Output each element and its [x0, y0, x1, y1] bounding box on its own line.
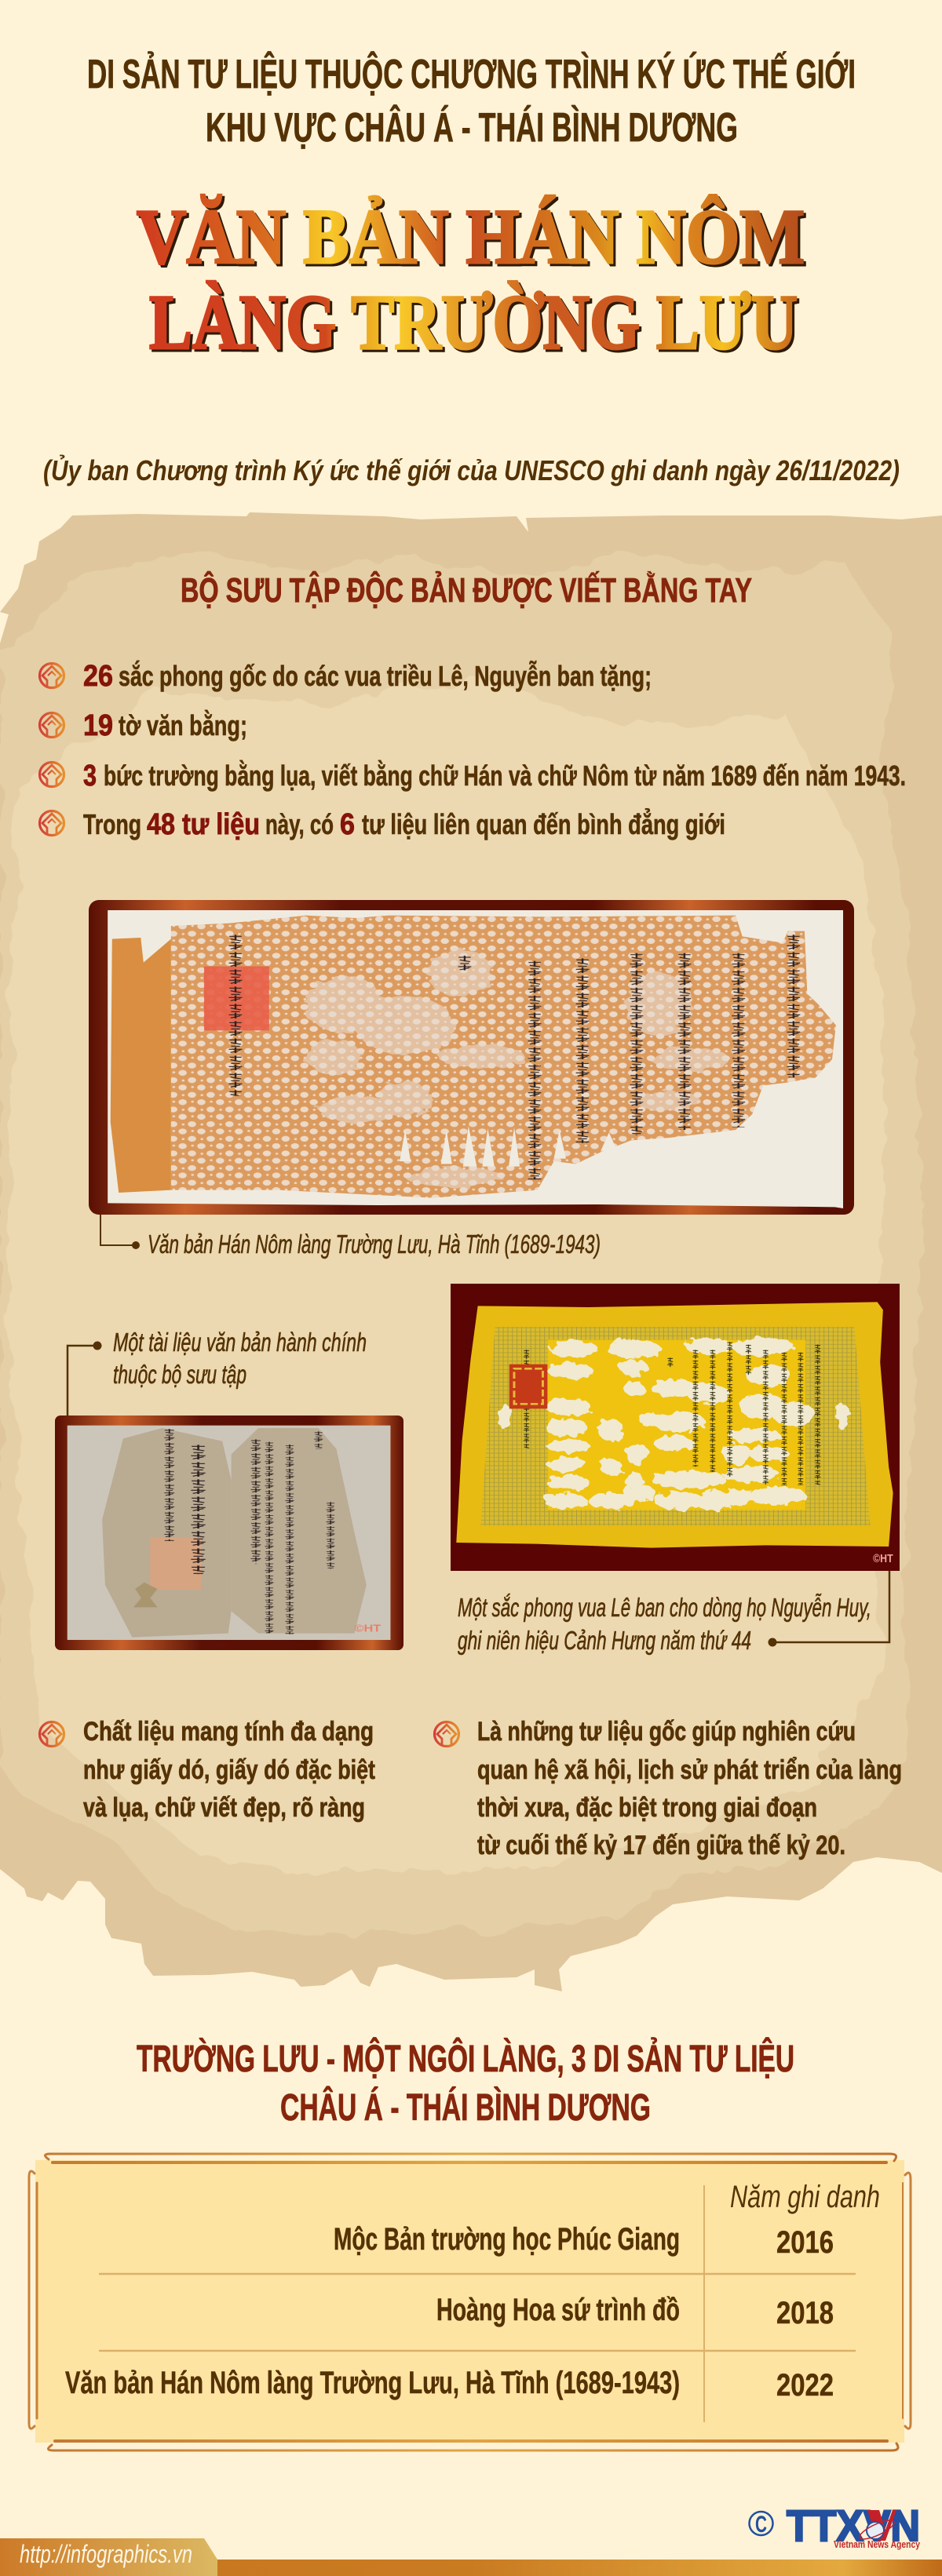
top heading [87, 51, 856, 151]
photo: yellow royal decree [451, 1284, 900, 1571]
caption: administrative document: Một tài liệu văn bản hành chính [113, 1328, 367, 1357]
logo: TTXVN: Vietnam News Agency [834, 2538, 921, 2550]
row 2016: 2016 [776, 2225, 834, 2260]
text block: research value: thời xưa, đặc biệt trong giai đoạn [477, 1793, 817, 1823]
caption: royal decree: ghi niên hiệu Cảnh Hưng năm thứ 44 [458, 1626, 751, 1655]
section heading: three heritages: CHÂU Á - THÁI BÌNH DƯƠNG [280, 2086, 651, 2129]
bullet 4: 48 tư liệu [147, 808, 260, 841]
bullet 1: sắc phong gốc do các vua triều Lê, Nguyễn ban tặng; [119, 659, 652, 692]
table background [35, 2160, 904, 2443]
photo: administrative document with frame [55, 1416, 403, 1650]
row 2022: 2022 [776, 2368, 834, 2403]
main title: LÀNG TRƯỜNG LƯU [149, 279, 798, 366]
photo: Han Nom document with frame [89, 900, 854, 1215]
bullet 2: tờ văn bằng; [119, 709, 247, 741]
photo: yellow royal decree: ©HT [873, 1553, 893, 1565]
table ornamental border [29, 2154, 911, 2450]
photo: administrative document with frame: ©HT [355, 1623, 382, 1634]
text block: research value: từ cuối thế kỷ 17 đến giữa thế kỷ 20. [477, 1831, 845, 1860]
section heading: three heritages [137, 2037, 794, 2129]
main title [137, 193, 805, 366]
table panel [29, 2154, 911, 2450]
table rules [99, 2185, 856, 2422]
logo: TTXVN: C [755, 2512, 767, 2538]
bullet 4: tư liệu liên quan đến bình đẳng giới [362, 807, 725, 840]
footer strip [0, 2538, 942, 2576]
bullet 4 [39, 807, 725, 841]
text block: research value [435, 1717, 902, 1860]
caption: administrative document: thuộc bộ sưu tập [113, 1360, 246, 1389]
table header: Năm ghi danh [730, 2180, 880, 2214]
bullet 2: 19 [83, 709, 113, 742]
bullet 1: 26 [83, 660, 113, 693]
caption: royal decree [458, 1571, 889, 1655]
text block: material: và lụa, chữ viết đẹp, rõ ràng [83, 1793, 365, 1823]
bullet 3: 3 [83, 760, 97, 792]
main title: VĂN BẢN HÁN NÔM [137, 193, 805, 280]
section heading: collection: BỘ SƯU TẬP ĐỘC BẢN ĐƯỢC VIẾT BẰNG TAY [181, 570, 752, 610]
bullet 1 [39, 659, 652, 693]
row 2018: 2018 [776, 2296, 834, 2330]
bullet 4: 6 [340, 808, 355, 841]
text block: material: Chất liệu mang tính đa dạng [83, 1717, 374, 1747]
text block: material [39, 1717, 375, 1823]
bullet 4: này, có [265, 808, 334, 840]
panel: parchment [0, 512, 942, 1991]
row 2018: Hoàng Hoa sứ trình đồ [436, 2293, 680, 2327]
row 2016: Mộc Bản trường học Phúc Giang [334, 2222, 680, 2257]
row 2022: Văn bản Hán Nôm làng Trường Lưu, Hà Tĩnh (1689-1943) [65, 2366, 680, 2400]
caption: photo 1 [100, 1215, 601, 1259]
logo: TTXVN: TTXVN [787, 2501, 920, 2550]
text block: material: như giấy dó, giấy dó đặc biệt [83, 1755, 375, 1785]
caption: photo 1: Văn bản Hán Nôm làng Trường Lưu, Hà Tĩnh (1689-1943) [148, 1230, 601, 1259]
footer strip: http://infographics.vn [20, 2540, 192, 2568]
bullet 2 [39, 709, 247, 742]
bullet 4: Trong [83, 808, 141, 840]
caption: administrative document [68, 1328, 367, 1416]
